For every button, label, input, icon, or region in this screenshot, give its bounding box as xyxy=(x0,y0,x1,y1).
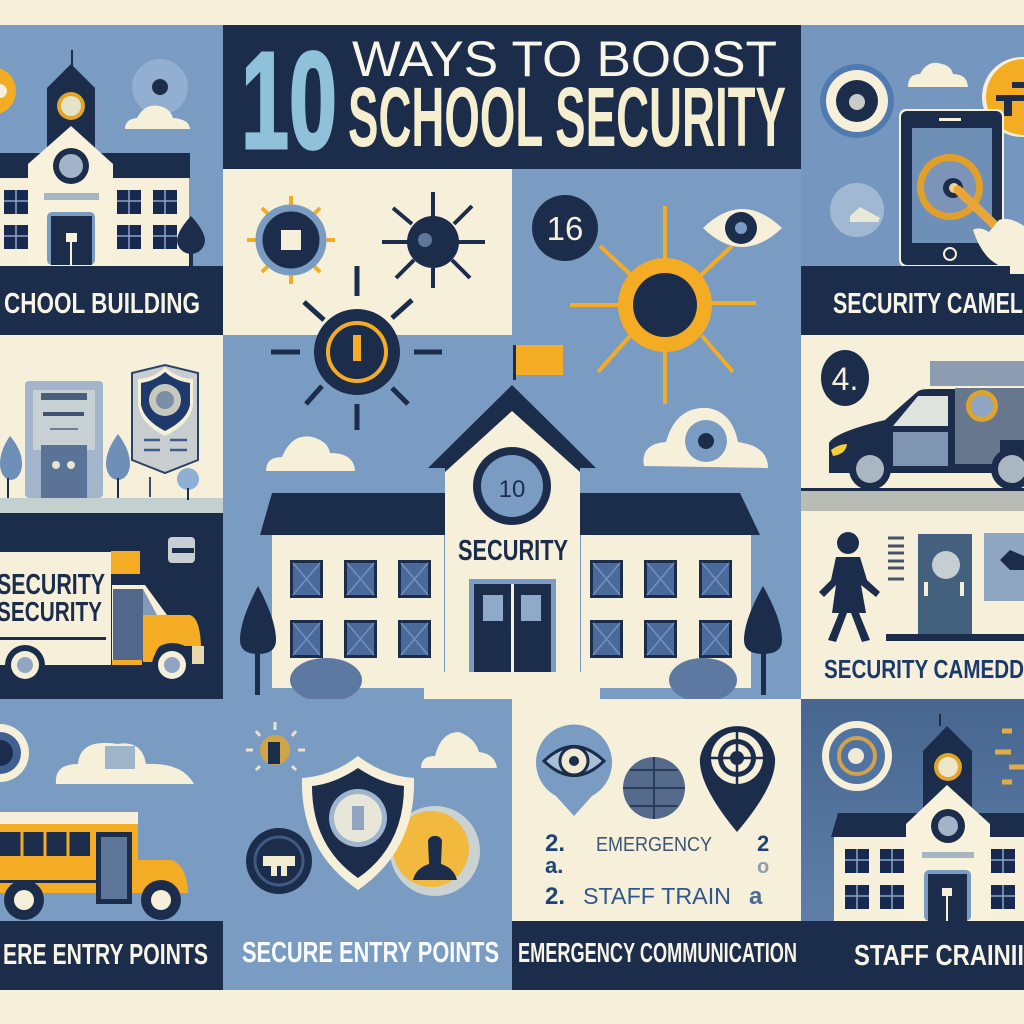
panel: school building xyxy=(0,25,223,266)
icon: security camera sun xyxy=(570,206,756,404)
icon: eye circle xyxy=(536,725,612,816)
flag xyxy=(513,345,563,380)
panel: sun camera xyxy=(512,169,801,404)
list text: a xyxy=(749,883,763,910)
icon: camera ring xyxy=(0,724,29,782)
label: secure entry points: SECURE ENTRY POINTS xyxy=(242,937,499,969)
tower: SECURITY xyxy=(458,535,568,567)
icon: door xyxy=(918,534,972,634)
label: entry points xyxy=(0,921,223,990)
icon: figure badge xyxy=(390,806,480,896)
icon: cloud xyxy=(125,106,190,129)
icon: partial badge xyxy=(0,67,16,115)
icon: camera ring xyxy=(822,721,892,791)
badge: 4: 4. xyxy=(832,361,858,397)
icon: camera sun badge xyxy=(247,196,335,284)
label: emergency communication: EMERGENCY COMMUNICATION xyxy=(518,937,797,968)
wings xyxy=(260,493,760,688)
icon: small emblem xyxy=(168,537,195,563)
icon: dark camera xyxy=(246,828,312,894)
panel: tablet xyxy=(801,25,1024,284)
icon: sparks xyxy=(995,731,1024,782)
cloud left xyxy=(266,436,355,471)
icon: shield sign xyxy=(132,365,198,473)
label: entry points: ERE ENTRY POINTS xyxy=(3,939,208,971)
title banner xyxy=(223,24,801,178)
title banner: 10 xyxy=(241,24,337,178)
list text xyxy=(545,830,769,910)
list text: o xyxy=(757,856,769,878)
icon: pointing hand xyxy=(958,190,1024,284)
list text: 2 xyxy=(757,831,769,856)
icon: small badge xyxy=(246,722,305,770)
illustration: school xyxy=(0,50,205,266)
cloud eye xyxy=(643,408,768,468)
icon: camera badge xyxy=(820,64,894,138)
list text: STAFF TRAIN xyxy=(583,883,731,909)
label: security camera xyxy=(801,266,1024,335)
icon: tablet xyxy=(899,109,1004,267)
panel: school bus xyxy=(0,699,223,921)
panel: access control xyxy=(0,335,223,513)
illustration: main school xyxy=(240,345,782,702)
panel: emergency xyxy=(512,699,801,921)
label: school building xyxy=(0,266,223,335)
list text: 2. xyxy=(545,883,565,910)
icon: school bus xyxy=(0,812,188,920)
icon: person xyxy=(819,532,880,642)
illustration: school xyxy=(831,714,1024,921)
badge: 16: 16 xyxy=(547,210,583,247)
list text: EMERGENCY xyxy=(596,834,712,856)
panel: shield xyxy=(223,699,512,990)
text: SECURITY twice: SECURITY xyxy=(0,596,102,627)
icon: framed picture xyxy=(984,533,1024,601)
trees and bushes xyxy=(240,586,782,702)
icon: eye xyxy=(703,209,782,247)
badge: 16 xyxy=(532,195,598,261)
panel: security bus xyxy=(0,513,223,699)
list text: a. xyxy=(545,853,563,878)
icon: shield xyxy=(302,756,414,890)
icon: server tower xyxy=(25,381,103,498)
label: staff training xyxy=(801,921,1024,990)
icon: cloud xyxy=(56,743,194,784)
panel: cream icons xyxy=(223,169,512,335)
tower xyxy=(424,385,600,699)
icon: van xyxy=(829,361,1024,490)
icon: yellow badge xyxy=(982,57,1024,137)
icon: trees xyxy=(0,434,199,500)
panel: staff and door xyxy=(801,511,1024,699)
title banner: WAYS TO BOOST xyxy=(352,31,777,87)
icon: location target pin xyxy=(700,726,775,832)
icon: faint circle xyxy=(132,59,188,115)
label: emergency communication xyxy=(512,921,801,990)
icon: keyhole burst xyxy=(271,266,442,430)
icon: dark camera burst xyxy=(382,192,485,288)
list text: 2. xyxy=(545,830,565,857)
icon: list lines xyxy=(888,538,904,579)
icon: faint circle xyxy=(830,183,884,237)
panel: center blue xyxy=(223,335,801,699)
panel: small school xyxy=(801,699,1024,921)
tower: 10 xyxy=(499,476,525,503)
panel: security van xyxy=(801,335,1024,511)
label: school building: CHOOL BUILDING xyxy=(4,288,200,320)
badge: 4 xyxy=(821,350,869,406)
text: SECURITY twice: SECURITY xyxy=(0,569,105,601)
icon: globe xyxy=(623,757,685,819)
icon: cloud xyxy=(908,63,968,87)
text: SECURITY twice xyxy=(0,569,105,627)
icon: cloud xyxy=(421,732,497,768)
